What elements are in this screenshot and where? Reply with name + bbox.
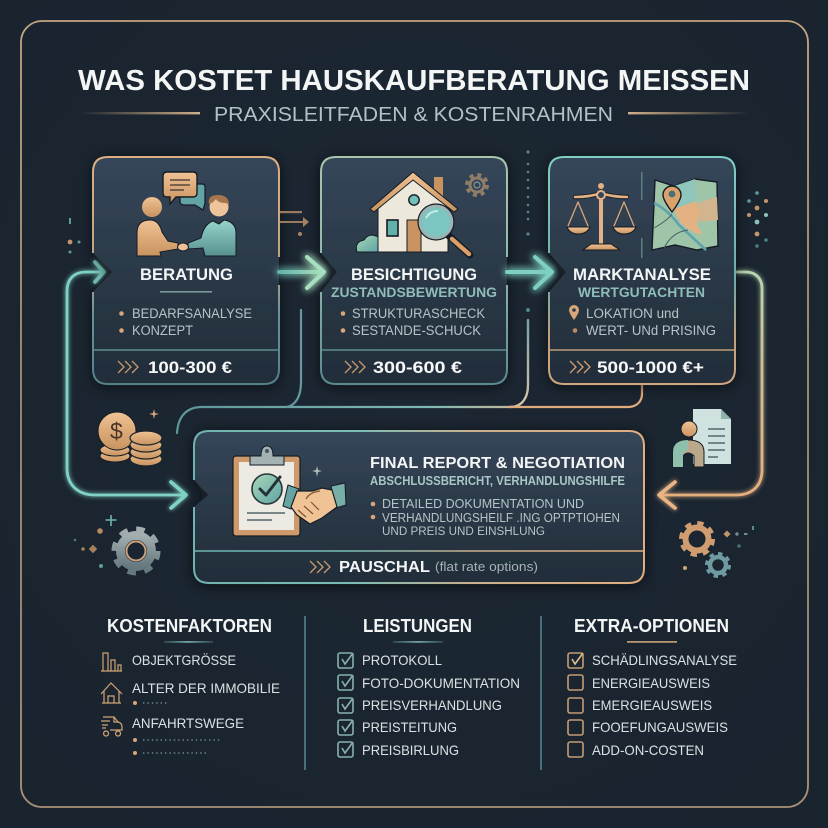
dotted decoration between cards 2 and 3 — [526, 150, 530, 312]
decorative dots right of card 3 — [747, 191, 768, 248]
heading: BERATUNG — [140, 266, 233, 284]
icon: coins — [98, 409, 162, 466]
placeholder dots — [133, 738, 220, 755]
items: PREISTEITUNG — [362, 719, 457, 735]
item: OBJEKTGRÖSSE — [132, 651, 236, 668]
bullet list — [371, 497, 620, 538]
arrow: small arrow between card 1 and 2 — [280, 211, 309, 236]
price — [118, 358, 233, 377]
bullet list — [119, 306, 252, 338]
bullet list: UND PREIS UND EINSHLUNG — [382, 526, 545, 538]
price: 500-1000 €+ — [597, 358, 704, 377]
items: SCHÄDLINGSANALYSE — [592, 652, 737, 668]
icon: gears right — [682, 524, 728, 576]
icon: small gear — [467, 175, 487, 195]
bullet list: KONZEPT — [132, 323, 193, 338]
panel: final report — [194, 431, 644, 583]
checklist — [338, 653, 353, 757]
sub heading: WERTGUTACHTEN — [578, 285, 705, 300]
items: ENERGIEAUSWEIS — [592, 675, 710, 691]
price — [310, 559, 538, 576]
price: 100-300 € — [148, 358, 233, 377]
items: FOOEFUNGAUSWEIS — [592, 719, 728, 735]
panel: Beratung — [93, 157, 279, 384]
arrow: card 2 to card 3 — [507, 257, 552, 288]
icon: gear left — [115, 530, 157, 572]
panel: Kostenfaktoren — [101, 616, 280, 755]
bullet list: VERHANDLUNGSHEILF .ING OPTPTIOHEN — [382, 511, 620, 525]
heading: LEISTUNGEN — [363, 616, 472, 636]
decorative dots left of card 1 — [68, 218, 80, 254]
icon: handshake consultation — [137, 172, 236, 256]
icon: handshake — [283, 483, 346, 524]
heading: MARKTANALYSE — [573, 266, 711, 284]
items — [592, 652, 737, 758]
bullet list: BEDARFSANALYSE — [132, 306, 252, 321]
item: ANFAHRTSWEGE — [132, 715, 244, 731]
icon: house — [101, 683, 122, 703]
bullet list — [341, 306, 485, 338]
connector: right tan loop from card 3 to final card — [659, 272, 762, 508]
price: PAUSCHAL — [339, 559, 430, 576]
sparkle — [312, 466, 322, 477]
icon: house with magnifier — [356, 172, 470, 255]
checklist — [568, 653, 583, 757]
icon: clipboard — [233, 446, 300, 536]
subtitle: PRAXISLEITFADEN & KOSTENRAHMEN — [214, 103, 613, 126]
items: FOTO-DOKUMENTATION — [362, 675, 520, 691]
sub heading: ZUSTANDSBEWERTUNG — [331, 285, 497, 300]
sub heading: ABSCHLUSSBERICHT, VERHANDLUNGSHILFE — [370, 474, 625, 488]
arrow: card 1 to card 2 — [279, 257, 324, 288]
heading: EXTRA-OPTIONEN — [574, 616, 729, 636]
panel: Marktanalyse — [549, 157, 735, 384]
icon: coins: $ — [110, 418, 123, 444]
item: ALTER DER IMMOBILIE — [132, 680, 280, 696]
items: PROTOKOLL — [362, 652, 442, 668]
heading: FINAL REPORT & NEGOTIATION — [370, 455, 625, 472]
icon: map — [652, 179, 718, 250]
price — [345, 358, 463, 377]
price: 300-600 € — [373, 358, 463, 377]
icon: scales — [567, 183, 636, 250]
heading: BESICHTIGUNG — [351, 266, 477, 284]
items: PREISBIRLUNG — [362, 742, 459, 758]
icon: van — [101, 717, 122, 736]
panel: Besichtigung — [321, 157, 507, 384]
connector: teal loop into card 1 and final card — [67, 262, 186, 508]
panel: Leistungen — [338, 616, 520, 758]
price: (flat rate options) — [435, 559, 538, 574]
connector: loop from final card up to card 3 area — [177, 310, 642, 433]
bullet list: STRUKTURASCHECK — [352, 306, 485, 321]
decorative dots right of gears — [683, 526, 754, 570]
items — [362, 652, 520, 758]
items: ADD-ON-COSTEN — [592, 742, 704, 758]
bullet list: WERT- UNd PRISING — [586, 323, 716, 338]
items: PREISVERHANDLUNG — [362, 697, 502, 713]
panel: Extra-Optionen — [568, 616, 737, 758]
decorative marks around left gear — [74, 515, 116, 568]
heading: KOSTENFAKTOREN — [107, 616, 272, 636]
title block — [78, 65, 750, 126]
bullet list: DETAILED DOKUMENTATION UND — [382, 497, 584, 511]
items: EMERGIEAUSWEIS — [592, 697, 712, 713]
bullet list: LOKATION und — [586, 306, 679, 321]
icon: building bars — [101, 653, 122, 671]
bullet list: SESTANDE-SCHUCK — [352, 323, 481, 338]
bullet list — [569, 305, 716, 338]
placeholder dots — [133, 701, 169, 705]
title: WAS KOSTET HAUSKAUFBERATUNG MEISSEN — [78, 65, 750, 97]
icon: document with person — [673, 409, 731, 467]
